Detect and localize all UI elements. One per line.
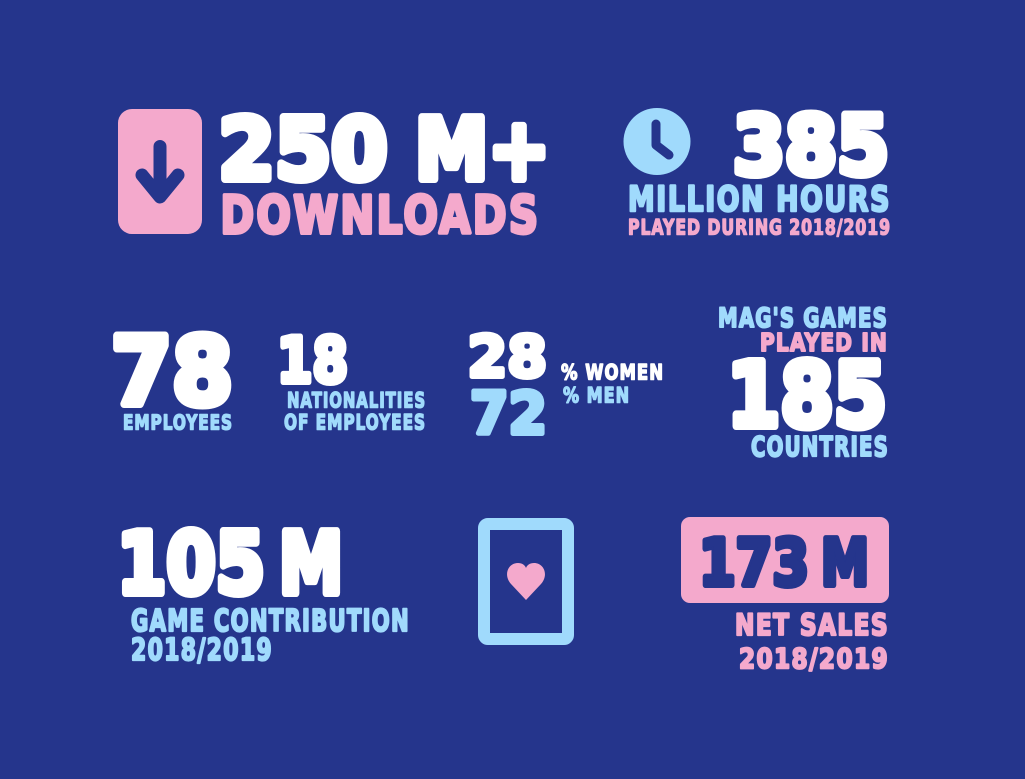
label: played in: PLAYED IN	[760, 328, 888, 357]
stat: 173 M: 173	[699, 527, 809, 601]
label: men: % MEN	[563, 384, 630, 408]
label: played during: PLAYED DURING 2018/2019	[628, 216, 891, 240]
label: years: 2018/2019	[739, 642, 889, 675]
label: years: 2018/2019	[131, 633, 273, 668]
icon: clock	[624, 108, 690, 175]
stat: 78: 78	[111, 318, 233, 427]
stat: 105 M: M	[279, 515, 343, 614]
label: game contribution: GAME CONTRIBUTION	[131, 604, 410, 639]
stat: 250 M+: 250	[218, 101, 388, 200]
panel: downloads	[118, 101, 550, 246]
panel: net sales	[681, 517, 889, 675]
label: million hours: MILLION HOURS	[628, 180, 891, 220]
panel: game contribution	[117, 515, 410, 668]
label: employees: EMPLOYEES	[123, 410, 233, 434]
panel: countries	[718, 303, 889, 463]
stat: 18: 18	[277, 324, 348, 397]
panel: nationalities	[277, 324, 426, 436]
stat: 173 M: M	[821, 527, 869, 601]
panel: hours played	[624, 100, 891, 240]
label: net sales: NET SALES	[735, 608, 889, 642]
stat: 28: 28	[468, 324, 547, 390]
stat: 72: 72	[470, 380, 547, 448]
stat: 385: 385	[733, 100, 889, 194]
stat: 250 M+	[218, 101, 550, 200]
label: downloads: DOWNLOADS	[220, 186, 540, 246]
panel: gender split	[468, 324, 664, 448]
label: of employees: OF EMPLOYEES	[284, 410, 426, 436]
label: women: % WOMEN	[561, 360, 664, 386]
label: countries: COUNTRIES	[751, 431, 889, 463]
badge	[681, 517, 889, 603]
label: mag's games: MAG'S GAMES	[718, 303, 888, 334]
stat: 185: 185	[727, 343, 887, 447]
icon: card with heart	[484, 524, 568, 639]
stat: 250 M+: M+	[415, 101, 550, 200]
panel: employees	[111, 318, 233, 434]
stat: 105 M: 105	[117, 515, 265, 614]
label: nationalities: NATIONALITIES	[287, 388, 426, 414]
icon: download	[118, 109, 202, 234]
